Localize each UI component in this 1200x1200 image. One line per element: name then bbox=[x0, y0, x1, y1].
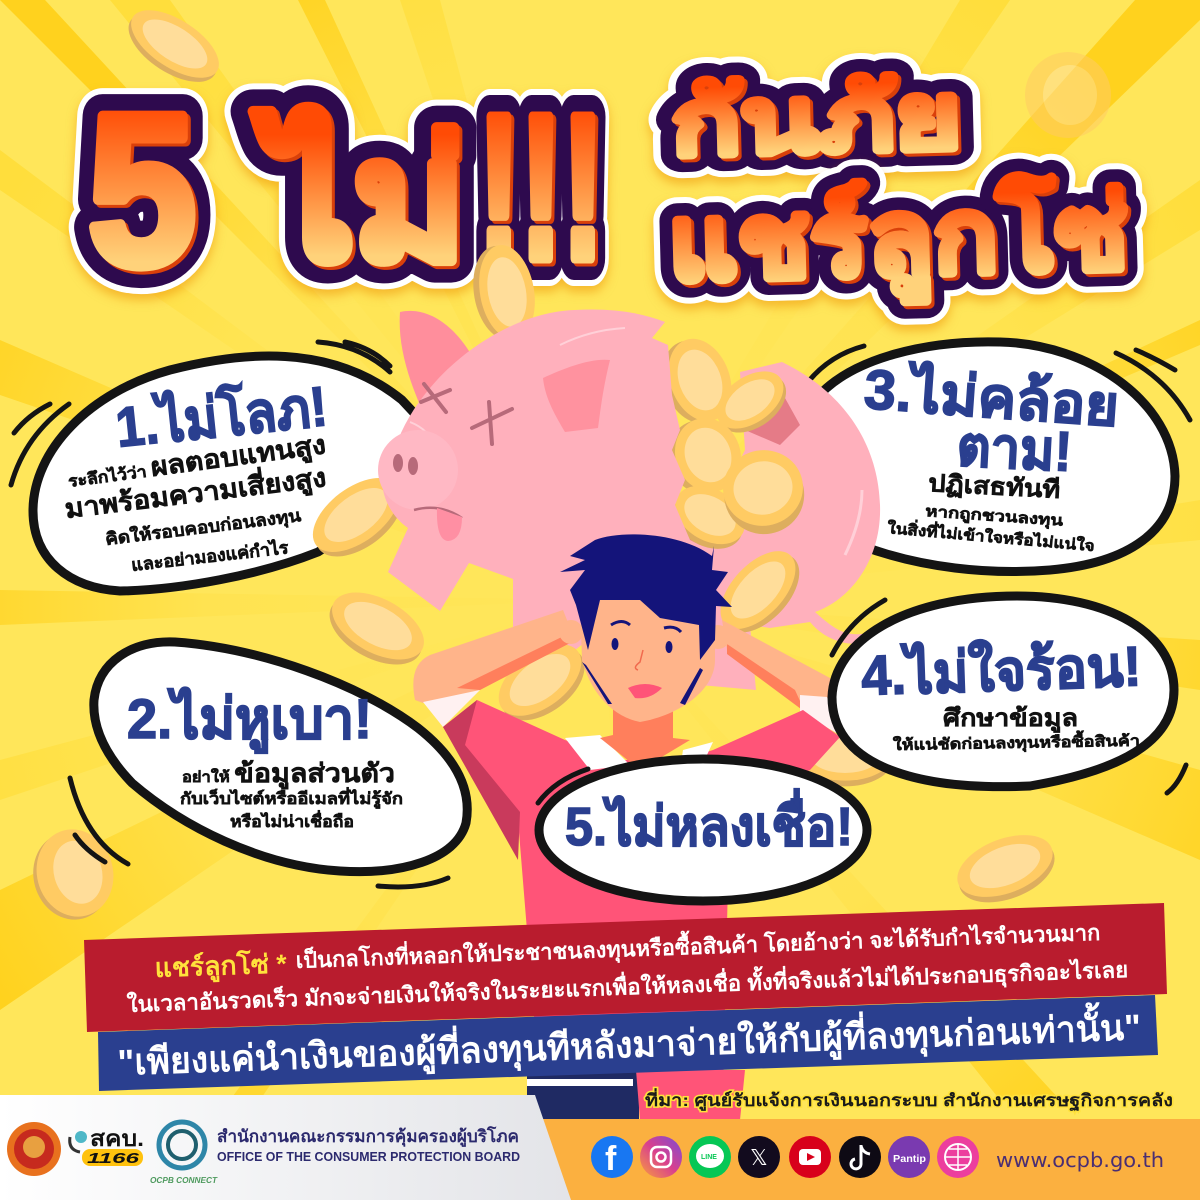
icon: pantip bbox=[888, 1136, 930, 1178]
title: five no: ไม่ bbox=[253, 107, 465, 293]
coin: behind man right bbox=[707, 538, 813, 646]
red explanation banner bbox=[84, 903, 1167, 1032]
icon: pantip: Pantip bbox=[893, 1154, 926, 1165]
title: five no: !!! bbox=[478, 73, 604, 302]
icon: facebook bbox=[591, 1136, 633, 1178]
bubble one line: reminder: ระลึกไว้ว่า ผลตอบแทนสูง bbox=[66, 429, 328, 495]
icon: tiktok bbox=[839, 1136, 881, 1178]
bubble three line: invited: หากถูกชวนลงทุน bbox=[925, 503, 1064, 531]
bubble three title line two: ตาม! bbox=[955, 414, 1074, 483]
man eyes and mouth bbox=[611, 622, 681, 698]
pig mouth and tongue bbox=[414, 508, 462, 541]
logo: OCPB bbox=[150, 1122, 218, 1185]
title: five no: ไม่ bbox=[253, 107, 465, 293]
icon: x: 𝕏 bbox=[750, 1145, 768, 1170]
bubble three line: refuse: ปฏิเสธทันที bbox=[928, 470, 1061, 504]
title: five no: !!! bbox=[478, 73, 604, 302]
title: ponzi: แชร์ลูกโซ่ bbox=[666, 171, 1130, 309]
icon: website bbox=[937, 1136, 979, 1178]
pig snout bbox=[378, 430, 458, 510]
coin stack in crack bbox=[651, 330, 810, 561]
bubble five title: 5.ไม่หลงเชื่อ! bbox=[565, 788, 853, 857]
coin: below pig left bbox=[318, 579, 435, 679]
title: five no: !!! bbox=[478, 73, 604, 302]
man arms bbox=[413, 610, 845, 712]
bubble two line: untrusted: หรือไม่น่าเชื่อถือ bbox=[230, 810, 354, 831]
blue quote banner bbox=[98, 995, 1158, 1091]
bubble four title: 4.ไม่ใจร้อน! bbox=[860, 633, 1142, 707]
agency name English: OFFICE OF THE CONSUMER PROTECTION BOARD bbox=[217, 1149, 520, 1164]
icon: line: LINE bbox=[701, 1154, 717, 1161]
man hair bbox=[560, 534, 732, 705]
title: five no: ไม่ bbox=[253, 107, 465, 293]
website address: www.ocpb.go.th bbox=[996, 1148, 1164, 1172]
pig nostrils bbox=[393, 454, 418, 475]
bubble three line: unsure: ในสิ่งที่ไม่เข้าใจหรือไม่แน่ใจ bbox=[887, 517, 1096, 555]
icon: line bbox=[689, 1136, 731, 1178]
title: five no: !!! bbox=[481, 76, 607, 305]
bubble two line: websites: กับเว็บไซต์หรืออีเมลที่ไม่รู้จัก bbox=[180, 787, 403, 810]
coin: above pig bbox=[466, 241, 542, 345]
icon: instagram bbox=[640, 1136, 682, 1178]
icon: x bbox=[738, 1136, 780, 1178]
title: ponzi: แชร์ลูกโซ่ bbox=[666, 171, 1130, 309]
icon: facebook: f bbox=[605, 1140, 617, 1178]
logo: hotline 1166: 1166 bbox=[87, 1150, 140, 1167]
pig front body bbox=[382, 310, 690, 650]
bubble three bbox=[808, 342, 1190, 572]
bubble four line: study: ศึกษาข้อมูล bbox=[943, 705, 1078, 733]
pig cheek ear patch bbox=[543, 360, 610, 432]
coin: lower right bbox=[949, 823, 1064, 915]
title: five no: 5 bbox=[88, 69, 196, 310]
coin: faint top right bbox=[1025, 52, 1111, 138]
coin: lower left bbox=[23, 821, 124, 928]
logo: OCPB: OCPB CONNECT bbox=[150, 1176, 218, 1185]
title: five no: ไม่ bbox=[256, 110, 468, 296]
man face bbox=[580, 600, 715, 722]
bubble two line: personal data: อย่าให้ ข้อมูลส่วนตัว bbox=[182, 758, 395, 790]
footer bar bbox=[0, 1095, 1200, 1200]
icon: youtube bbox=[789, 1136, 831, 1178]
source credit: ที่มา: ศูนย์รับแจ้งการเงินนอกระบบ สำนักงานเศรษฐกิจการคลัง bbox=[645, 1088, 1173, 1112]
banner line two: ในเวลาอันรวดเร็ว มักจะจ่ายเงินให้จริงในระยะแรกเพื่อให้หลงเชื่อ ทั้งที่จริงแล้วไม่ได้ประกอบธุรกิจอะไรเลย bbox=[126, 953, 1129, 1019]
man with hands on head bbox=[413, 534, 845, 1090]
pig back half bbox=[660, 362, 880, 690]
logo: hotline 1166 bbox=[70, 1126, 144, 1167]
title: protect: กันภัย bbox=[673, 68, 966, 178]
bubble four bbox=[832, 596, 1186, 793]
bubble five bbox=[538, 759, 867, 901]
bubble one title: 1.ไม่โลภ! bbox=[113, 373, 330, 459]
title: five no: 5 bbox=[91, 72, 199, 313]
bubble four line: clear: ให้แน่ชัดก่อนลงทุนหรือซื้อสินค้า bbox=[893, 729, 1140, 755]
man collar and neck bbox=[565, 735, 713, 770]
banner line one: เป็นกลโกงที่หลอกให้ประชาชนลงทุนหรือซื้อสินค้า โดยอ้างว่า จะได้รับกำไรจำนวนมาก bbox=[295, 916, 1101, 975]
coin: top left bbox=[117, 0, 230, 96]
coin: between arm and head bbox=[486, 630, 598, 735]
logo: hotline 1166: สคบ. bbox=[90, 1126, 144, 1151]
bubble one line: profit: และอย่ามองแค่กำไร bbox=[130, 537, 290, 575]
bubble two bbox=[70, 642, 467, 887]
coin: behind bubble four bbox=[798, 729, 892, 786]
title: ponzi: แชร์ลูกโซ่ bbox=[666, 171, 1130, 309]
agency name Thai: สำนักงานคณะกรรมการคุ้มครองผู้บริโภค bbox=[217, 1126, 519, 1148]
logo: government seal bbox=[7, 1122, 61, 1176]
title: ponzi: แชร์ลูกโซ่ bbox=[670, 174, 1133, 312]
coin: left of pig bbox=[300, 463, 416, 571]
pig dead eyes bbox=[421, 384, 512, 444]
bubble two title: 2.ไม่หูเบา! bbox=[127, 686, 372, 754]
banner highlighted term: แชร์ลูกโซ่ * bbox=[154, 947, 288, 985]
title: five no: 5 bbox=[88, 69, 196, 310]
bubble one bbox=[11, 342, 430, 591]
title: protect: กันภัย bbox=[670, 65, 962, 175]
bubble one line: think: คิดให้รอบคอบก่อนลงทุน bbox=[104, 505, 303, 550]
bubble one line: risk: มาพร้อมความเสี่ยงสูง bbox=[63, 458, 328, 526]
piggy bank broken bbox=[378, 310, 880, 690]
bubble three title line one: 3.ไม่คล้อย bbox=[862, 356, 1121, 438]
title: protect: กันภัย bbox=[670, 65, 962, 175]
man shirt bbox=[443, 700, 840, 1090]
title: protect: กันภัย bbox=[670, 65, 962, 175]
quote text: "เพียงแค่นำเงินของผู้ที่ลงทุนทีหลังมาจ่ายให้กับผู้ที่ลงทุนก่อนเท่านั้น" bbox=[117, 1000, 1142, 1086]
title: five no: 5 bbox=[88, 69, 196, 310]
pants and belt bbox=[527, 1070, 745, 1120]
title: five no bbox=[88, 69, 607, 313]
man sleeves bbox=[423, 690, 840, 735]
pig ear bbox=[400, 311, 480, 405]
